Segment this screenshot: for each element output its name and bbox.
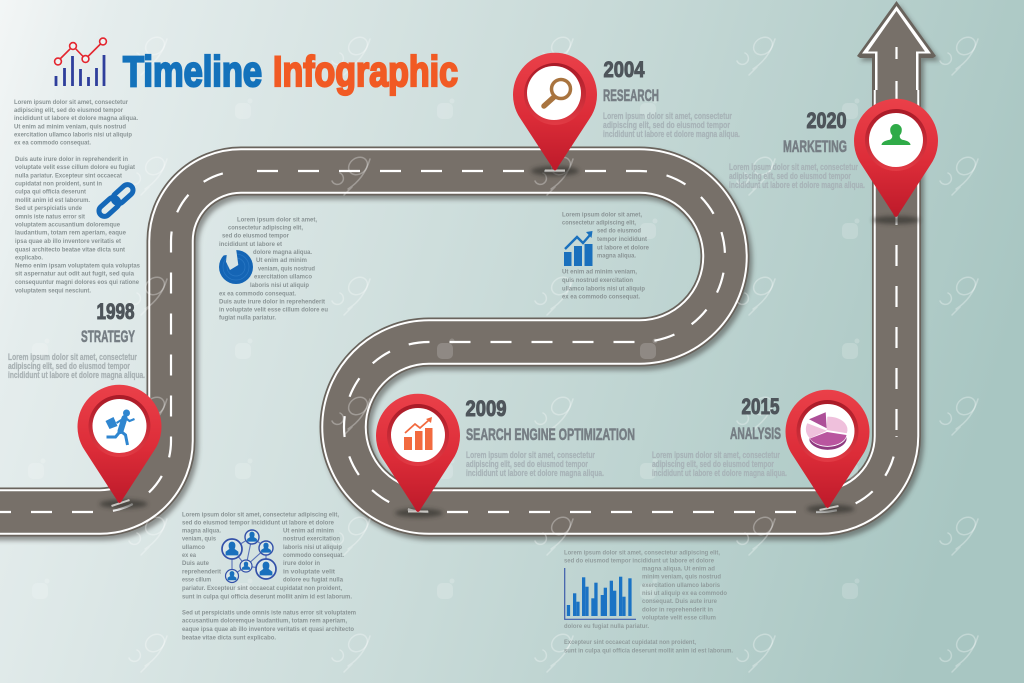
text block: chart paragraph: exercitation ullamco laboris xyxy=(642,582,720,589)
icon: donut chart xyxy=(219,248,253,284)
text block: top left intro: Ut enim ad minim veniam, quis nostrud xyxy=(14,123,126,130)
road xyxy=(0,1,940,516)
pin ring xyxy=(88,395,150,457)
pin face xyxy=(527,66,581,120)
text block: network paragraph: eaque ipsa quae ab illo inventore veritatis et quasi architecto xyxy=(182,626,354,633)
pin tip marker xyxy=(820,506,838,510)
text block: network paragraph: Duis aute xyxy=(182,560,209,567)
text block: left column xyxy=(15,156,140,294)
pin body xyxy=(513,53,597,170)
milestone label: 2015 analysis xyxy=(652,394,787,478)
small watermark marks xyxy=(28,98,860,599)
text block: network paragraph: sunt in culpa qui officia deserunt mollit anim id est laborum. xyxy=(182,593,352,600)
milestone label: 2004 research xyxy=(603,57,740,139)
text block: inside first curve: consectetur adipiscing elit, xyxy=(228,225,303,232)
text block: chart paragraph: dolor in reprehenderit in xyxy=(642,606,713,613)
pin ring xyxy=(865,109,927,171)
text block: left column: mollit anim id est laborum. xyxy=(15,197,90,204)
text block: inside first curve: Lorem ipsum dolor sit amet, xyxy=(237,216,317,223)
pin face xyxy=(869,113,923,167)
icon: orange growth bars xyxy=(404,417,432,450)
text block: network paragraph: sed do eiusmod tempor incididunt ut labore et dolore xyxy=(182,519,334,526)
text block: research detail: Lorem ipsum dolor sit amet, xyxy=(562,211,642,218)
text block: research detail: tempor incididunt xyxy=(597,236,648,243)
road white line xyxy=(0,50,897,512)
text block: left column: consequuntur magni dolores eos qui ratione xyxy=(15,279,139,286)
icon: magnifier xyxy=(544,80,570,106)
icon: rising bars xyxy=(564,231,592,266)
pin ring xyxy=(524,63,586,125)
text block: network paragraph: pariatur. Excepteur sint occaecat cupidatat non proident, xyxy=(182,585,342,592)
text block: inside first curve: in voluptate velit esse cillum dolore eu xyxy=(219,306,328,313)
pin shadow xyxy=(806,504,854,514)
text block: research detail: consectetur adipiscing elit, xyxy=(562,220,636,227)
milestone label: 2004 research: RESEARCH xyxy=(603,87,659,105)
text block: network paragraph: reprehenderit xyxy=(182,568,222,575)
pin: 2009 search engine optimization xyxy=(376,394,460,518)
text block: network paragraph xyxy=(182,511,356,641)
text block: inside first curve xyxy=(219,216,328,322)
pin body xyxy=(78,385,162,503)
text block: chart paragraph: sed do eiusmod tempor incididunt ut labore et dolore xyxy=(564,557,714,564)
text block: research detail: quis nostrud exercitation xyxy=(562,277,633,284)
road surface xyxy=(0,50,897,512)
pin: 1998 strategy xyxy=(78,385,162,508)
text block: network paragraph: ullamco xyxy=(182,544,205,551)
pin shadow xyxy=(872,216,920,224)
text block: left column: Duis aute irure dolor in reprehenderit in xyxy=(15,156,128,163)
text block: top left intro: Lorem ipsum dolor sit amet, consectetur xyxy=(14,99,128,106)
text block: left column: voluptate velit esse cillum dolore eu fugiat xyxy=(15,164,136,171)
milestone label: 2009 search engine optimization: SEARCH ENGINE OPTIMIZATION xyxy=(466,426,635,444)
text block: left column: nulla pariatur. Excepteur sint occaecat xyxy=(15,172,123,179)
text block: research detail: sed do eiusmod xyxy=(597,228,641,235)
text block: network paragraph: commodo consequat. xyxy=(283,552,344,559)
pin body xyxy=(854,99,938,217)
text block: left column: voluptatem accusantium doloremque xyxy=(15,222,120,229)
text block: network paragraph: nostrud exercitation xyxy=(283,536,340,543)
milestone label: 1998 strategy: incididunt ut labore et dolore magna aliqua. xyxy=(8,370,145,380)
milestone label: 2020 marketing xyxy=(729,108,865,190)
text block: top left intro xyxy=(14,99,138,147)
milestone label: 2020 marketing: Lorem ipsum dolor sit amet, consectetur xyxy=(729,162,858,172)
arrow head white line xyxy=(862,6,931,90)
milestone label: 2009 search engine optimization: Lorem ipsum dolor sit amet, consectetur xyxy=(466,450,595,460)
text block: network paragraph: beatae vitae dicta sunt explicabo. xyxy=(182,634,276,641)
text block: top left intro: incididunt ut labore et dolore magna aliqua. xyxy=(14,115,138,122)
text block: network paragraph: dolore eu fugiat nulla xyxy=(283,577,343,584)
text block: chart paragraph: minim veniam, quis nostrud xyxy=(642,574,721,581)
milestone label: 2020 marketing: 2020 xyxy=(806,108,846,133)
milestone label: 2004 research: incididunt ut labore et dolore magna aliqua. xyxy=(603,129,740,139)
text block: chart paragraph xyxy=(564,549,733,654)
text block: research detail: Ut enim ad minim veniam, xyxy=(562,269,637,276)
pin tip marker xyxy=(545,170,565,172)
pin shadow xyxy=(100,500,148,508)
icon: pie chart xyxy=(806,412,847,450)
milestone label: 2020 marketing: incididunt ut labore et dolore magna aliqua. xyxy=(729,180,865,190)
icon: chain link xyxy=(97,182,135,219)
arrow head surface xyxy=(868,11,925,90)
title: Timeline xyxy=(123,48,262,96)
text block: left column: culpa qui officia deserunt xyxy=(15,189,87,196)
title xyxy=(123,48,458,96)
text block: network paragraph: Sed ut perspiciatis unde omnis iste natus error sit voluptatem xyxy=(182,609,356,616)
milestone label: 2015 analysis: 2015 xyxy=(742,394,780,419)
milestone label: 2004 research: adipiscing elit, sed do eiusmod tempor xyxy=(603,120,730,130)
milestone label: 2020 marketing: MARKETING xyxy=(783,138,847,156)
milestone label: 2009 search engine optimization: 2009 xyxy=(466,396,506,421)
text block: network paragraph: veniam, quis xyxy=(182,536,216,543)
pin face xyxy=(92,399,146,453)
text block: research detail xyxy=(562,211,649,301)
text block: chart paragraph: nisi ut aliquip ex ea commodo xyxy=(642,590,727,597)
text block: research detail: ut labore et dolore xyxy=(597,244,649,251)
pin: 2004 research xyxy=(513,53,597,176)
text block: chart paragraph: voluptate velit esse cillum xyxy=(642,614,716,621)
icon: running businessman xyxy=(106,410,134,445)
pin: 2015 analysis xyxy=(786,390,870,514)
text block: inside first curve: Duis aute irure dolor in reprehenderit xyxy=(219,298,326,305)
milestone label: 2015 analysis: Lorem ipsum dolor sit amet, consectetur xyxy=(652,450,780,460)
text block: network paragraph: in voluptate velit xyxy=(283,568,336,575)
text block: left column: voluptatem sequi nesciunt. xyxy=(15,287,91,294)
arrow head edge xyxy=(857,1,936,90)
text block: research detail: ex ea commodo consequat. xyxy=(562,294,640,301)
text block: left column: Sed ut perspiciatis unde xyxy=(15,205,82,212)
milestone label: 2015 analysis: ANALYSIS xyxy=(730,425,781,443)
pin shadow xyxy=(395,508,443,518)
text block: inside first curve: exercitation ullamco xyxy=(254,274,312,281)
text block: left column: ipsa quae ab illo inventore veritatis et xyxy=(15,238,122,245)
milestone label: 1998 strategy: 1998 xyxy=(96,299,134,324)
road shadow xyxy=(0,5,940,516)
text block: chart paragraph: consequat. Duis aute irure xyxy=(642,598,717,605)
milestone label: 1998 strategy: STRATEGY xyxy=(81,328,135,346)
milestone label: 1998 strategy xyxy=(8,299,145,380)
pin face xyxy=(391,408,445,462)
text block: inside first curve: veniam, quis nostrud xyxy=(258,265,315,272)
text block: chart paragraph: Lorem ipsum dolor sit amet, consectetur adipiscing elit, xyxy=(564,549,720,556)
bar chart xyxy=(565,568,636,619)
text block: chart paragraph: magna aliqua. Ut enim ad xyxy=(642,565,715,572)
text block: network paragraph: laboris nisi ut aliquip xyxy=(283,544,342,551)
milestone label: 2009 search engine optimization: incididunt ut labore et dolore magna aliqua. xyxy=(466,468,604,478)
icon: people network xyxy=(222,530,276,582)
pin tip marker xyxy=(112,500,130,506)
text block: inside first curve: ex ea commodo consequat. xyxy=(219,290,296,297)
title: Infographic xyxy=(273,48,458,96)
pin: 2020 marketing xyxy=(854,99,938,224)
text block: left column: cupidatat non proident, sunt in xyxy=(15,181,102,188)
milestone label: 1998 strategy: Lorem ipsum dolor sit amet, consectetur xyxy=(8,352,137,362)
milestone label: 2004 research: 2004 xyxy=(604,57,645,82)
text block: chart paragraph: dolore eu fugiat nulla pariatur. xyxy=(564,623,649,630)
text block: inside first curve: Ut enim ad minim xyxy=(256,257,307,264)
text block: network paragraph: Ut enim ad minim xyxy=(283,527,334,534)
text block: inside first curve: laboris nisi ut aliquip xyxy=(250,282,309,289)
pin tip marker xyxy=(408,510,428,512)
pin ring xyxy=(387,404,449,466)
lane dashes xyxy=(0,47,897,512)
text block: inside first curve: fugiat nulla pariatur. xyxy=(219,315,276,322)
icon: person xyxy=(882,124,910,145)
text block: network paragraph: ex ea xyxy=(182,552,196,559)
pin ring xyxy=(796,400,858,462)
milestone label: 2020 marketing: adipiscing elit, sed do eiusmod tempor xyxy=(729,171,851,181)
text block: network paragraph: accusantium doloremque laudantium, totam rem aperiam, xyxy=(182,618,347,625)
text block: network paragraph: irure dolor in xyxy=(283,560,320,567)
text block: left column: laudantium, totam rem aperiam, eaque xyxy=(15,230,126,237)
text block: left column: sit aspernatur aut odit aut fugit, sed quia xyxy=(15,271,134,278)
text block: top left intro: adipiscing elit, sed do eiusmod tempor xyxy=(14,107,123,114)
text block: research detail: magna aliqua. xyxy=(597,253,636,260)
milestone label: 2004 research: Lorem ipsum dolor sit amet, consectetur xyxy=(603,111,732,121)
pin body xyxy=(786,390,870,508)
text block: top left intro: ex ea commodo consequat. xyxy=(14,140,91,147)
text block: top left intro: exercitation ullamco laboris nisi ut aliquip xyxy=(14,132,132,139)
milestone label: 2009 search engine optimization: adipiscing elit, sed do eiusmod tempor xyxy=(466,459,588,469)
text block: research detail: ullamco laboris nisi ut aliquip xyxy=(562,285,645,292)
milestone label: 2015 analysis: incididunt ut labore et dolore magna aliqua. xyxy=(652,468,787,478)
text block: left column: quasi architecto beatae vitae dicta sunt xyxy=(15,246,126,253)
text block: network paragraph: esse cillum xyxy=(182,577,211,584)
text block: network paragraph: Lorem ipsum dolor sit amet, consectetur adipiscing elit, xyxy=(182,511,339,518)
pin shadow xyxy=(531,166,579,176)
text block: inside first curve: sed do eiusmod tempor xyxy=(222,233,289,240)
icon: title chart xyxy=(55,38,106,86)
text block: inside first curve: incididunt ut labore et xyxy=(219,241,283,248)
text block: inside first curve: dolore magna aliqua. xyxy=(253,249,312,256)
milestone label: 2015 analysis: adipiscing elit, sed do eiusmod tempor xyxy=(652,459,774,469)
text block: left column: explicabo. xyxy=(15,254,43,261)
pin face xyxy=(800,404,854,458)
text block: left column: Nemo enim ipsam voluptatem quia voluptas xyxy=(15,263,140,270)
text block: left column: omnis iste natus error sit xyxy=(15,213,86,220)
text block: network paragraph: magna aliqua. xyxy=(182,527,221,534)
text block: chart paragraph: Excepteur sint occaecat cupidatat non proident, xyxy=(564,639,696,646)
pin body xyxy=(376,394,460,512)
watermarks xyxy=(129,34,979,672)
milestone label: 1998 strategy: adipiscing elit, sed do eiusmod tempor xyxy=(8,361,130,371)
text block: chart paragraph: sunt in culpa qui officia deserunt mollit anim id est laborum. xyxy=(564,647,733,654)
road edge xyxy=(0,50,897,512)
milestone label: 2009 search engine optimization xyxy=(466,396,635,478)
